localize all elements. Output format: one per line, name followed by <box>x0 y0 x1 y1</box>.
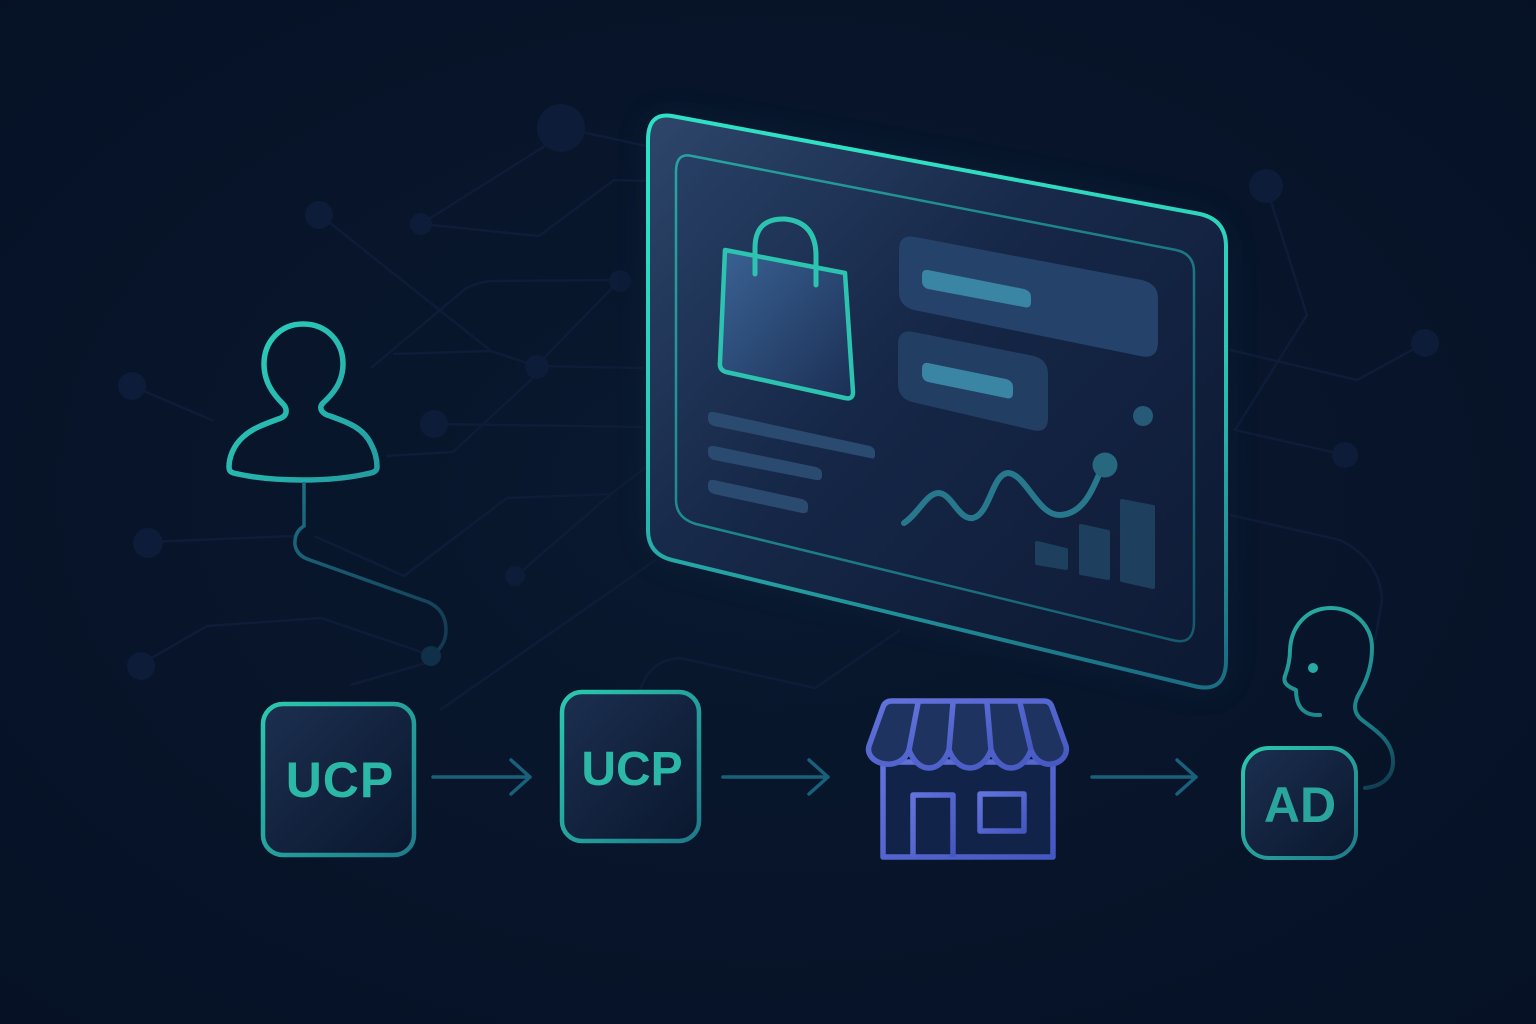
AD box <box>1243 748 1356 858</box>
UCP box 1 <box>263 704 414 855</box>
arrow 1 <box>433 760 530 794</box>
background network <box>118 104 1439 710</box>
line chart <box>904 452 1118 523</box>
node <box>421 646 441 666</box>
tablet glow <box>648 116 1226 688</box>
dashboard tablet <box>648 116 1226 688</box>
tablet frame <box>648 116 1226 688</box>
icon: agent head <box>1284 608 1393 788</box>
arrow 2 <box>723 760 828 794</box>
top card <box>899 237 1158 357</box>
text lines <box>708 412 875 513</box>
UCP box 1: UCP <box>286 752 394 808</box>
AD box: AD <box>1264 777 1336 833</box>
icon: user <box>229 324 377 480</box>
tablet screen <box>676 155 1194 641</box>
UCP box 2 <box>562 692 699 841</box>
bar chart <box>1037 501 1153 587</box>
arrow 3 <box>1092 760 1196 794</box>
icon: storefront <box>869 701 1066 857</box>
connector: user to UCP <box>295 482 446 656</box>
status dot <box>1133 406 1153 426</box>
UCP box 2: UCP <box>581 743 683 796</box>
second card <box>898 332 1048 431</box>
icon: shopping bag <box>720 219 853 398</box>
